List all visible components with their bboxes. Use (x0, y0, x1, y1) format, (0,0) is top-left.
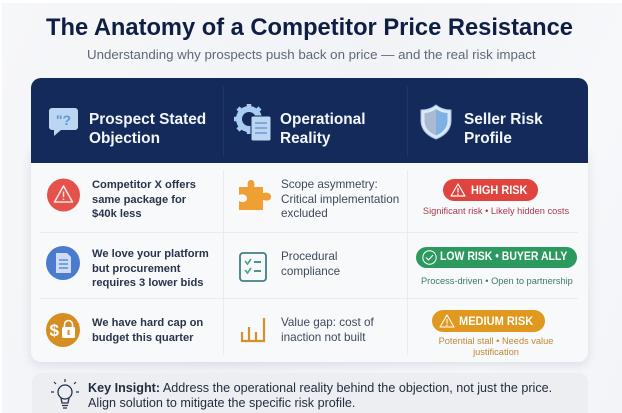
reality text 3: Value gap: cost of (281, 316, 374, 329)
panel: table body (31, 150, 588, 362)
objection text 3 (92, 317, 203, 344)
reality text 2 (281, 250, 340, 278)
objection text 1: Competitor X offers (92, 179, 196, 191)
heading: seller risk profile (464, 111, 543, 147)
badge: high risk: HIGH RISK (471, 183, 527, 197)
icon: gear and document (234, 104, 270, 140)
insight text: Key Insight: Address the operational reality behind the objection, not just the price. (88, 381, 552, 395)
reality text 3 (281, 316, 374, 344)
badge: low risk (416, 247, 577, 268)
objection text 3: budget this quarter (92, 332, 194, 344)
risk note 3: justification (473, 346, 519, 356)
heading: seller risk profile: Seller Risk (464, 111, 543, 128)
reality text 2: Procedural (281, 250, 338, 263)
insight text: Align solution to mitigate the specific risk profile. (88, 396, 355, 410)
objection text 1: $40k less (92, 208, 142, 220)
reality text 1: Critical implementation (281, 192, 399, 206)
heading: prospect stated objection (89, 111, 206, 147)
heading: operational reality: Reality (280, 130, 330, 147)
icon: question speech bubble (49, 108, 78, 136)
insight text (88, 381, 552, 410)
row 2: low risk (46, 246, 577, 289)
icon: budget lock circle (46, 313, 80, 347)
objection text 3: We have hard cap on (92, 317, 203, 329)
icon: light bulb (51, 379, 79, 409)
subtitle: Understanding why prospects push back on price — and the real risk impact (87, 47, 536, 62)
heading: prospect stated objection: Prospect Stated (89, 111, 206, 128)
heading: prospect stated objection: Objection (89, 130, 160, 147)
badge: medium risk (432, 310, 545, 332)
icon: red warning circle (47, 178, 80, 212)
reality text 1: excluded (281, 207, 328, 220)
heading: operational reality: Operational (280, 111, 366, 128)
heading: seller risk profile: Profile (464, 130, 512, 147)
icon: blue document circle (46, 246, 80, 280)
objection text 2: requires 3 lower bids (92, 277, 203, 289)
reality text 1 (281, 178, 399, 220)
panel: table header (31, 78, 588, 163)
objection text 2: We love your platform (92, 248, 209, 260)
risk note 1: Significant risk • Likely hidden costs (423, 206, 569, 216)
badge: high risk (443, 179, 538, 201)
risk note 3: Potential stall • Needs value (439, 336, 553, 346)
reality text 3: inaction not built (281, 330, 365, 344)
row 3: medium risk (46, 310, 553, 357)
badge: medium risk: MEDIUM RISK (459, 314, 533, 328)
badge: low risk: LOW RISK • BUYER ALLY (440, 251, 567, 263)
reality text 2: compliance (281, 264, 340, 278)
row 1: high risk (47, 178, 569, 220)
icon: checklist (239, 252, 267, 282)
risk note 2: Process-driven • Open to partnership (421, 276, 573, 286)
risk note 3 (439, 336, 553, 357)
icon: budget lock circle: $ (50, 321, 60, 340)
panel: key insight (32, 373, 588, 413)
icon: shield (420, 104, 452, 140)
icon: puzzle piece (239, 180, 271, 210)
reality text 1: Scope asymmetry: (281, 178, 378, 191)
objection text 2 (92, 248, 209, 289)
objection text 1 (92, 179, 196, 220)
heading: operational reality (280, 111, 366, 147)
icon: question speech bubble: "? (56, 112, 71, 128)
icon: bar chart (240, 318, 266, 342)
objection text 2: but procurement (92, 262, 181, 274)
title: The Anatomy of a Competitor Price Resistance (46, 15, 573, 41)
objection text 1: same package for (92, 194, 186, 206)
